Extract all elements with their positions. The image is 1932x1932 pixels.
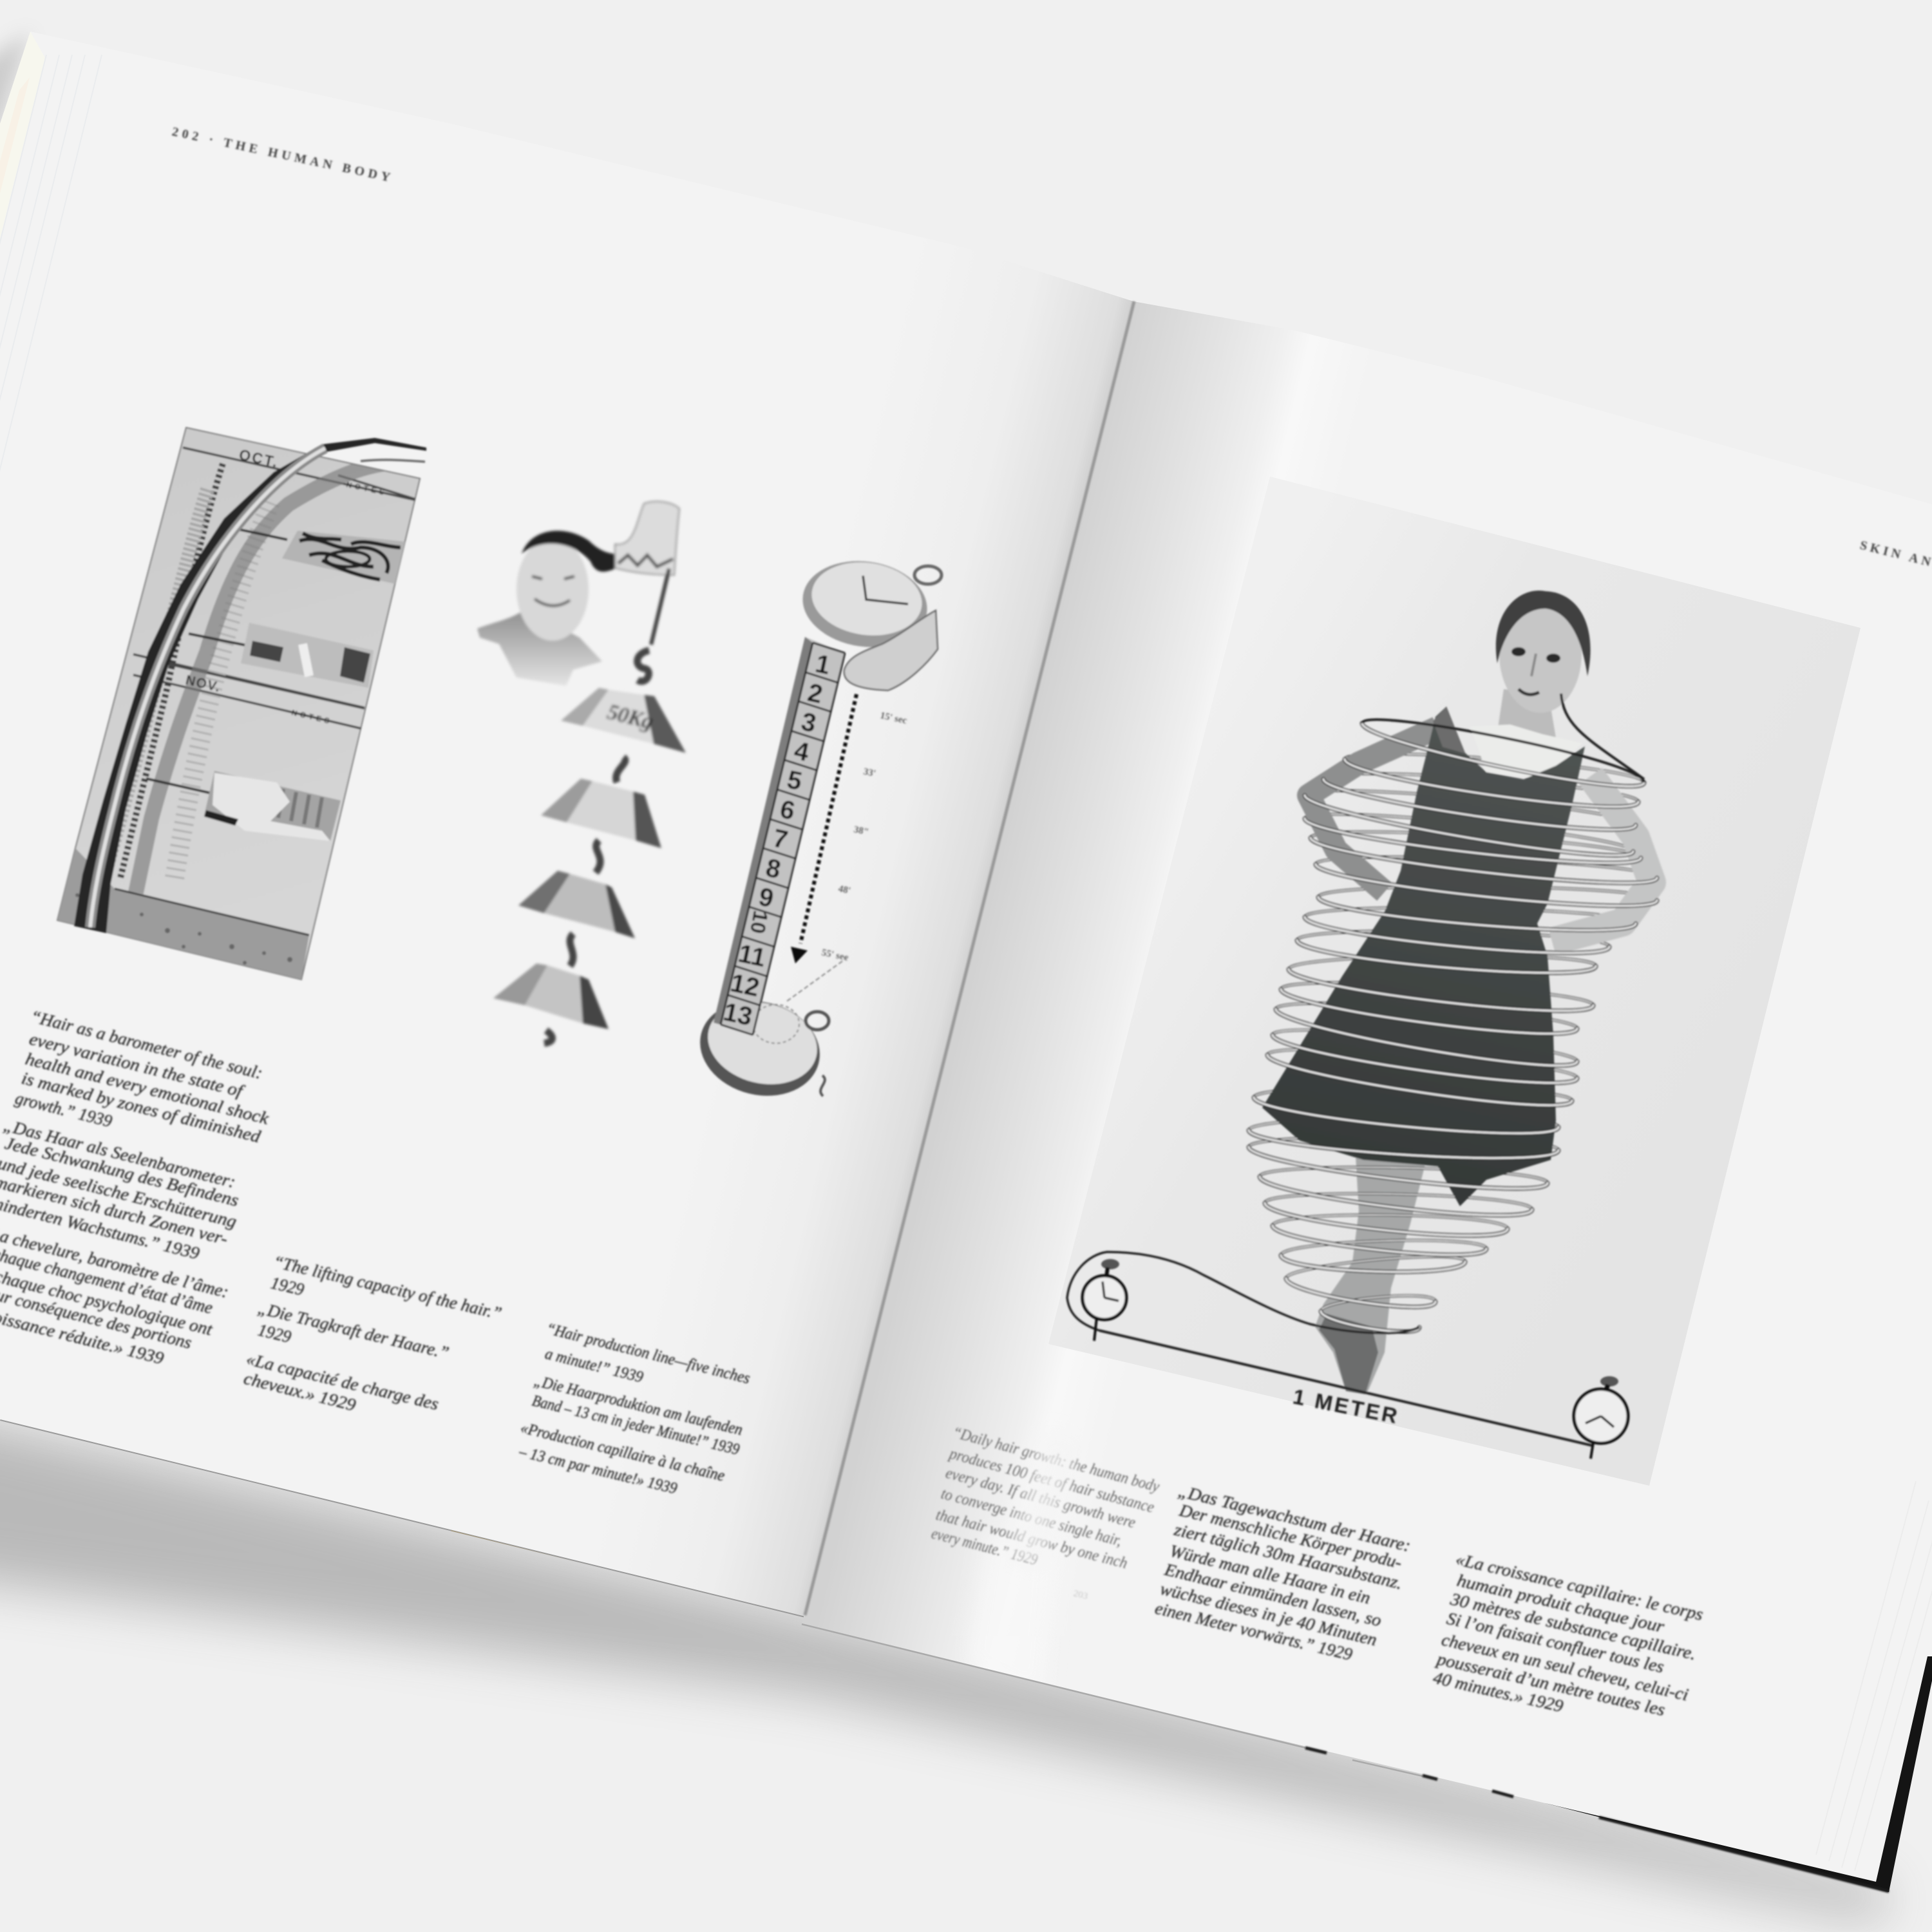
caption: hair production line: «Production capillaire à la chaîne: [519, 1419, 726, 1485]
coil front: [1249, 723, 1657, 1332]
panel: right page: [802, 301, 1932, 1891]
panel: left page: [0, 32, 1133, 1618]
arms: [1309, 728, 1437, 892]
hair strand from head: [1362, 694, 1644, 782]
caption: hair production line: – 13 cm par minute!» 1939: [517, 1443, 679, 1498]
caption: daily hair growth english: [929, 1424, 1162, 1572]
date column: [120, 464, 223, 878]
english caption: growth.” 1939: [14, 1088, 115, 1131]
ruler: 9: [756, 882, 776, 913]
ruler: 10: [746, 909, 773, 936]
ruler: 7: [770, 824, 790, 855]
caption: daily hair growth english: every day. If all this growth were: [943, 1464, 1137, 1531]
photo: woman wrapped in hair coil: [1048, 477, 1861, 1486]
caption: daily hair growth french: Si l’on faisait confluer tous les: [1445, 1609, 1666, 1676]
ruler: 12: [728, 969, 762, 1002]
english caption: is marked by zones of diminished: [20, 1068, 263, 1146]
illustration: man with hair lifting weights: [477, 502, 686, 1043]
ruler: 1: [813, 649, 833, 680]
picture: sleeping in bed: [204, 771, 341, 841]
caption: daily hair growth french: pousserait d’un mètre toutes les: [1434, 1649, 1667, 1719]
ruler: 8: [763, 853, 783, 884]
dotted arrow: [791, 694, 857, 963]
caption: lifting capacity: cheveux.» 1929: [242, 1368, 358, 1415]
page header: left: 202 · THE HUMAN BODY: [171, 124, 392, 185]
caption: daily hair growth french: «La croissance capillaire: le corps: [1454, 1549, 1705, 1624]
caption: hair production line: “Hair production line—five inches: [545, 1320, 752, 1387]
caption: lifting capacity: «La capacité de charge des: [245, 1349, 440, 1414]
weight 2: [541, 779, 661, 848]
book cover: [1546, 1597, 1932, 1892]
chart: hair barometer: NOTES: [345, 480, 385, 497]
french caption: [0, 1222, 231, 1368]
time labels: 38": [853, 824, 869, 838]
caption: daily hair growth english: every minute.” 1929: [929, 1525, 1039, 1569]
caption: daily hair growth german: [1153, 1481, 1412, 1664]
caption: daily hair growth english: that hair would grow by one inch: [934, 1506, 1130, 1572]
caption: daily hair growth english: produces 100 feet of hair substance: [947, 1444, 1156, 1517]
german caption: und jede seelische Erschütterung: [0, 1153, 238, 1231]
caption: hair production line: „Die Haarproduktion am laufenden: [533, 1372, 744, 1439]
ruler: 6: [777, 795, 797, 826]
english caption: every variation in the state of: [28, 1029, 247, 1101]
german caption: [0, 1115, 241, 1264]
caption: hair production line: [517, 1320, 752, 1498]
caption: lifting capacity: 1929: [256, 1320, 294, 1347]
chart: hair barometer: [57, 428, 426, 980]
section lines: [133, 448, 420, 728]
caption: daily hair growth french: humain produit chaque jour: [1455, 1571, 1667, 1636]
man bust: [477, 609, 602, 686]
right stopwatch: [1574, 1376, 1628, 1459]
picture: classroom: [241, 623, 374, 688]
skin band: [57, 848, 309, 980]
ruler: 11: [735, 939, 768, 972]
picture: pile of figures: [282, 531, 405, 584]
time labels: [786, 710, 908, 1002]
caption: daily hair growth german: Endhaar einmünden lassen, so: [1162, 1559, 1383, 1630]
caption: daily hair growth french: 30 mètres de substance capillaire.: [1448, 1589, 1698, 1663]
left stopwatch: [1083, 1259, 1126, 1341]
caption: daily hair growth english: “Daily hair growth: the human body: [951, 1424, 1162, 1496]
collar: [1470, 724, 1582, 779]
caption: daily hair growth german: Würde man alle Haare in ein: [1168, 1541, 1372, 1607]
coil back: [1249, 754, 1657, 1311]
caption: daily hair growth german: wüchse dieses in je 40 Minuten: [1159, 1579, 1379, 1649]
bottom watch: [690, 989, 830, 1108]
caption: lifting capacity: 1929: [269, 1273, 307, 1300]
page highlight over caption: [1024, 1436, 1063, 1565]
bottom edge pieces: [802, 1624, 1423, 1776]
head: [1496, 591, 1591, 713]
chart: hair barometer: OCT.: [238, 446, 279, 470]
german caption: „Das Haar als Seelenbarometer:: [2, 1115, 238, 1191]
caption: daily hair growth german: einen Meter vorwärts.” 1929: [1153, 1598, 1354, 1664]
caption: daily hair growth german: ziert täglich 30m Haarsubstanz.: [1172, 1519, 1405, 1593]
caption: lifting capacity: “The lifting capacity of the hair.”: [272, 1252, 504, 1323]
english caption: “Hair as a barometer of the soul:: [29, 1007, 265, 1083]
neck: [1494, 689, 1558, 753]
gutter line: [805, 301, 1134, 1615]
ruler: 13: [721, 998, 755, 1031]
ruler: 4: [791, 736, 812, 767]
strap: [1433, 706, 1465, 753]
ruler: 5: [784, 765, 804, 796]
chart: hair barometer: NOTES: [290, 708, 330, 725]
hair shadow: [128, 464, 384, 895]
caption: daily hair growth german: Der menschliche Körper produ-: [1177, 1500, 1404, 1572]
legs: [1315, 1156, 1426, 1394]
hooks: [544, 650, 649, 1043]
weight 4: [493, 963, 609, 1029]
weight 3: [518, 871, 635, 938]
caption: daily hair growth english: to converge into one single hair,: [939, 1485, 1124, 1550]
caption: hair as a barometer: [0, 1007, 271, 1368]
time labels: 33': [862, 766, 876, 779]
caption: lifting capacity: „Die Tragkraft der Haare.”: [256, 1298, 451, 1363]
chart: hair barometer: NOV.: [184, 672, 222, 695]
caption: hair production line: Band – 13 cm in jeder Minute!” 1939: [531, 1392, 741, 1459]
time labels: 48': [837, 884, 851, 896]
1 METER label: 1 METER: [1291, 1385, 1399, 1428]
caption: hair production line: a minute!” 1939: [544, 1345, 645, 1387]
caption: daily hair growth french: cheveux en un seul cheveu, celui-ci: [1440, 1630, 1690, 1705]
ruler: 3: [799, 707, 819, 738]
man face: [516, 538, 589, 641]
german caption: Jede Schwankung des Befindens: [3, 1133, 241, 1210]
ruler: 2: [805, 678, 825, 709]
english caption: health and every emotional shock: [24, 1049, 271, 1128]
caption: daily hair growth german: „Das Tagewachstum der Haare:: [1177, 1481, 1412, 1555]
hand holding ruler: [844, 611, 938, 690]
ruler: [714, 637, 845, 1035]
man hair and queue: [522, 531, 616, 572]
caption: lifting capacity: [242, 1252, 504, 1415]
weight 1: [561, 688, 686, 753]
time labels: 15' sec: [879, 710, 908, 726]
weight 1: 50Kg: [605, 700, 656, 734]
dress: [1262, 706, 1585, 1206]
caption: daily hair growth french: 40 minutes.» 1929: [1432, 1668, 1566, 1716]
illustration: ruler with stopwatches: [690, 553, 942, 1108]
caption: daily hair growth french: [1432, 1549, 1705, 1719]
page number: 203: [1072, 1588, 1089, 1602]
tail and baseline: [1067, 1252, 1593, 1446]
time labels: 55' sec: [820, 947, 849, 963]
rope: [651, 569, 669, 645]
hair: [74, 438, 426, 933]
english caption: [14, 1007, 271, 1146]
top watch: [797, 553, 942, 655]
hand: [615, 502, 679, 575]
